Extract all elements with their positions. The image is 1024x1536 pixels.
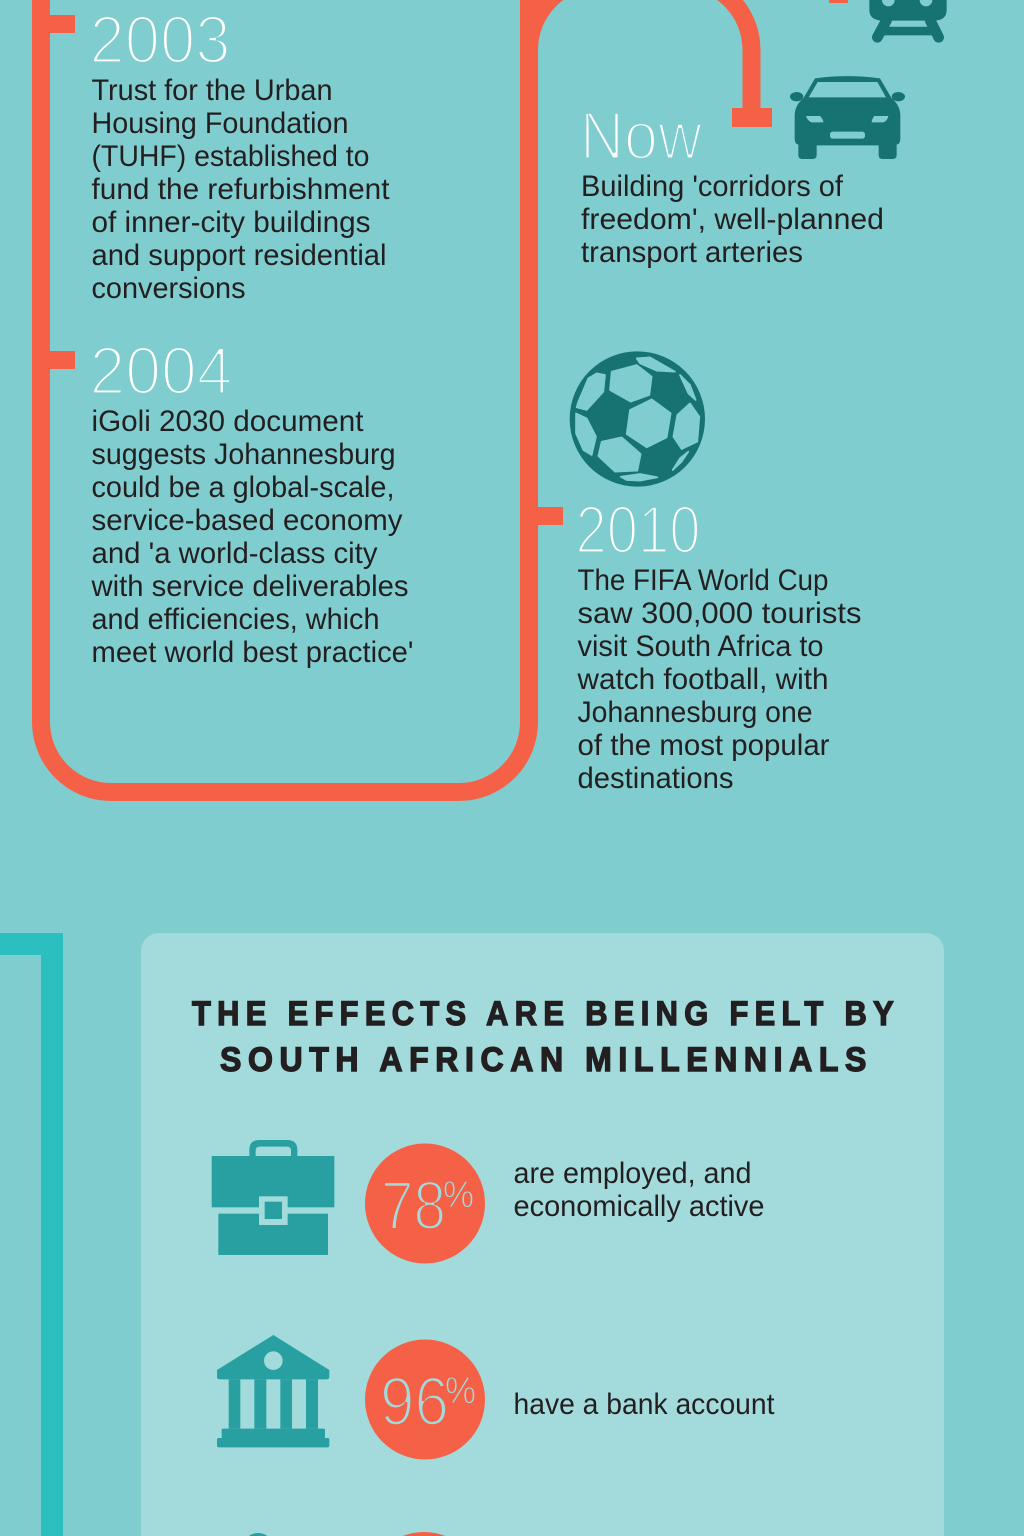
stat text: employed: are employed, and: [514, 1157, 752, 1190]
heading: THE EFFECTS ARE BEING FELT BY: [192, 995, 900, 1033]
stat circle: 78%: [365, 1144, 485, 1264]
timeline entry: Now: Now: [580, 98, 703, 174]
timeline entry: Now: freedom', well-planned: [581, 203, 884, 236]
timeline entry: 2003: 2003: [90, 2, 230, 78]
timeline entry: 2010: The FIFA World Cup: [578, 564, 828, 597]
stat circle: 96%: %: [445, 1370, 476, 1412]
icon: train: [869, 0, 947, 37]
stat text: bank account: have a bank account: [514, 1388, 775, 1421]
icon: football: [570, 351, 705, 487]
timeline entry: 2003: fund the refurbishment: [92, 173, 390, 206]
timeline entry: 2004: [90, 333, 414, 669]
stat circle: cropped third: [402, 1532, 446, 1536]
decorative teal bracket: [0, 944, 52, 1536]
timeline entry: 2004: could be a global-scale,: [92, 471, 394, 504]
timeline entry: 2004: and 'a world-class city: [92, 537, 378, 570]
timeline entry: 2003: Housing Foundation: [92, 107, 348, 140]
stat circle: 96%: [365, 1340, 485, 1460]
timeline entry: 2010: visit South Africa to: [578, 630, 824, 663]
icon: bank: [217, 1335, 329, 1447]
timeline entry: 2010: destinations: [578, 762, 734, 795]
timeline line: top arch to Now: [529, 0, 848, 127]
timeline entry: 2010: watch football, with: [577, 663, 828, 696]
stat circle: 78%: 78: [381, 1167, 446, 1244]
stat circle: 78%: %: [443, 1174, 474, 1216]
timeline entry: 2004: with service deliverables: [91, 570, 409, 603]
timeline entry: 2004: service-based economy: [92, 504, 402, 537]
timeline entry: 2003: (TUHF) established to: [92, 140, 370, 173]
timeline entry: 2003: Trust for the Urban: [92, 74, 332, 107]
timeline line: left loop: [41, 0, 563, 792]
stat circle: 96%: 96: [380, 1363, 449, 1440]
timeline entry: 2004: and efficiencies, which: [92, 603, 380, 636]
timeline entry: 2004: 2004: [90, 333, 232, 409]
timeline entry: 2004: iGoli 2030 document: [92, 405, 364, 438]
timeline entry: Now: [580, 98, 884, 269]
icon: briefcase: [212, 1140, 334, 1255]
timeline entry: 2003: and support residential: [92, 239, 386, 272]
timeline entry: 2010: 2010: [576, 492, 700, 568]
timeline entry: 2003: of inner-city buildings: [92, 206, 370, 239]
heading: [192, 995, 900, 1079]
stat text: employed: [514, 1157, 764, 1223]
timeline entry: 2003: conversions: [92, 272, 246, 305]
stat text: employed: economically active: [514, 1190, 764, 1223]
timeline entry: Now: transport arteries: [581, 236, 803, 269]
timeline entry: 2010: Johannesburg one: [578, 696, 812, 729]
timeline entry: 2010: [576, 492, 862, 795]
timeline entry: 2010: saw 300,000 tourists: [578, 597, 862, 630]
timeline entry: 2010: of the most popular: [578, 729, 830, 762]
icon: car: [790, 76, 905, 159]
timeline entry: 2004: suggests Johannesburg: [92, 438, 396, 471]
timeline entry: 2003: [90, 2, 390, 305]
heading: SOUTH AFRICAN MILLENNIALS: [220, 1041, 873, 1079]
icon: cropped third icon: [249, 1533, 267, 1536]
panel: millennials: [141, 933, 944, 1536]
timeline entry: Now: Building 'corridors of: [581, 170, 844, 203]
timeline entry: 2004: meet world best practice': [92, 636, 414, 669]
